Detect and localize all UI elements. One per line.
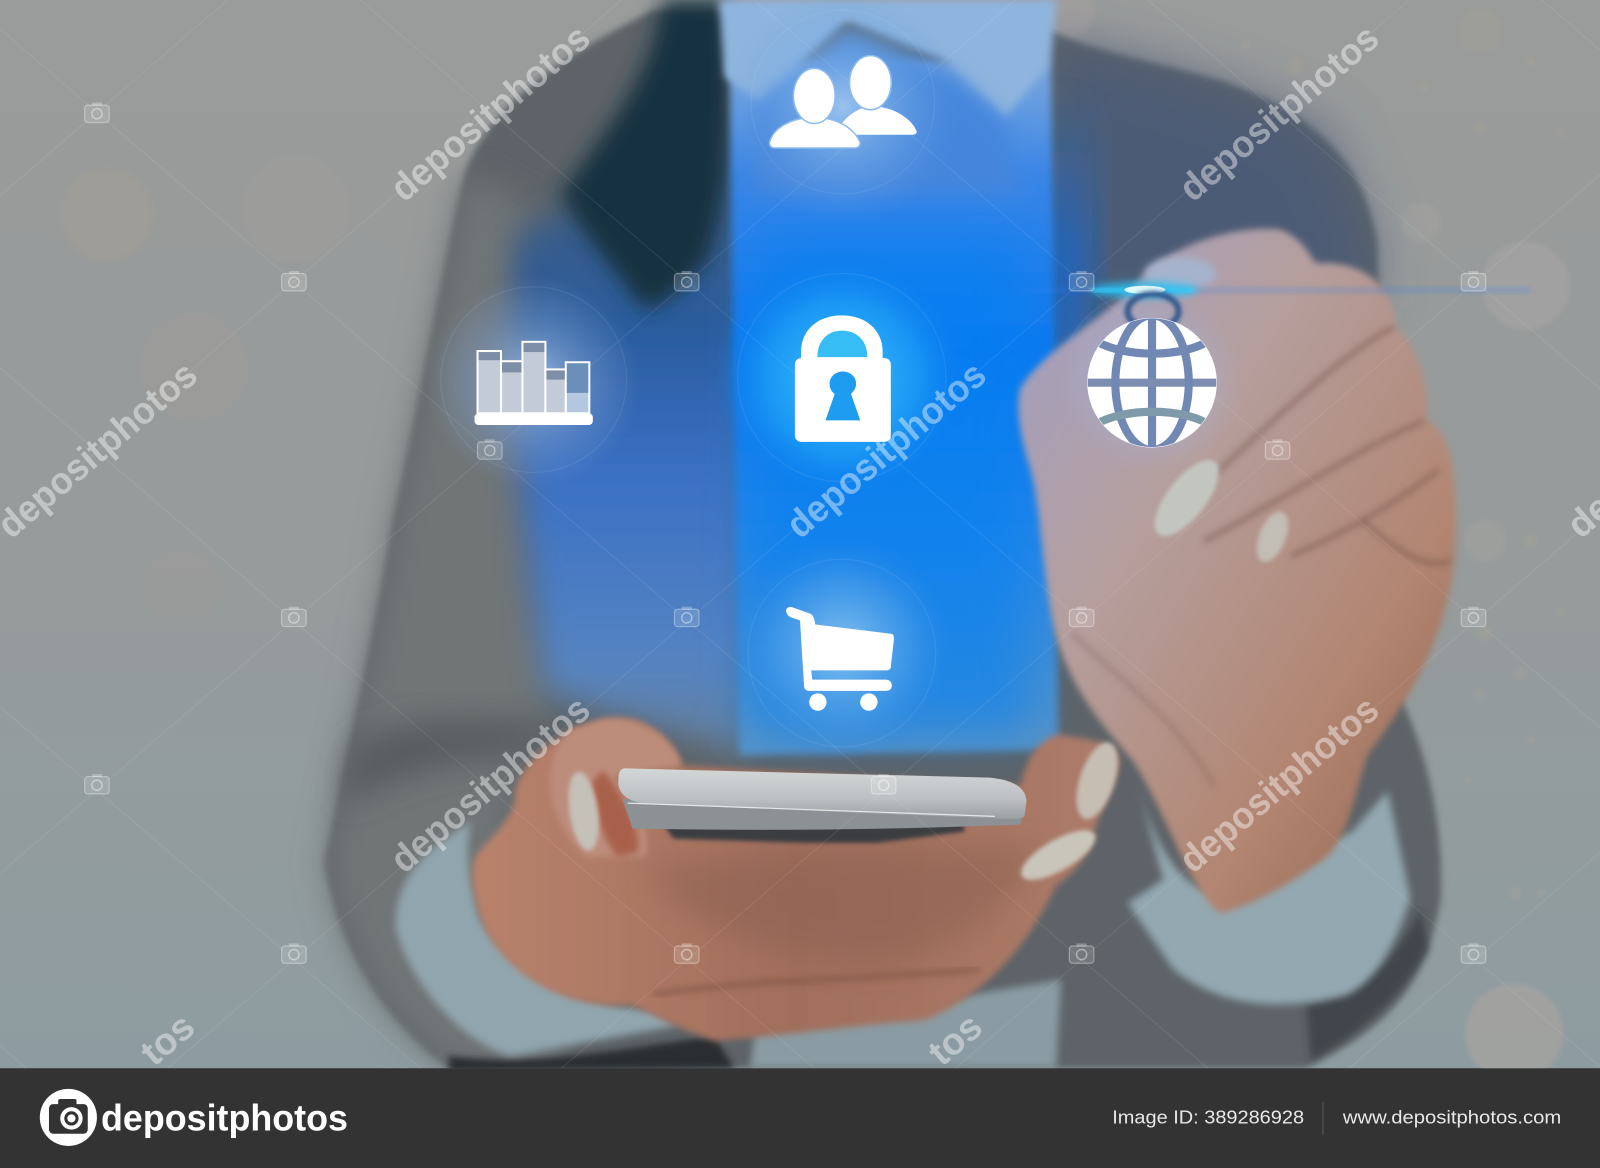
icon: people bbox=[769, 56, 917, 148]
left sleeve cuff bbox=[396, 821, 679, 1056]
watermark wordmarks: depositphotos bbox=[1171, 16, 1387, 209]
watermark wordmarks: depositphotos bbox=[382, 16, 598, 209]
footer logo: camera badge bbox=[40, 1089, 97, 1146]
nail: fingertip top bbox=[1145, 257, 1216, 290]
icon: shopping cart bbox=[786, 607, 894, 711]
glow: cart bbox=[757, 552, 934, 725]
blazer bbox=[324, 10, 1441, 1071]
left sleeve bbox=[324, 173, 571, 1068]
lower dark edge bbox=[449, 1036, 735, 1071]
nail: middle finger bbox=[1255, 510, 1290, 564]
shirt bbox=[730, 61, 1058, 755]
footer bar bbox=[0, 1068, 1600, 1168]
glow: people bbox=[757, 20, 933, 204]
hair bbox=[561, 0, 730, 308]
right hand bbox=[1018, 229, 1456, 913]
glow: chart bbox=[435, 287, 628, 476]
watermark wordmarks: depositphotos bbox=[778, 353, 994, 546]
thumb tip shadow bbox=[590, 770, 638, 857]
blue jacket overlay bbox=[514, 122, 750, 755]
icon halo rings bbox=[440, 47, 1116, 748]
icon: bar chart bbox=[474, 342, 593, 425]
lower shirt below hands bbox=[750, 980, 1061, 1068]
thumb nail bbox=[566, 770, 602, 852]
shirt collar bbox=[719, 0, 1056, 117]
icon: globe bbox=[1082, 314, 1222, 451]
speckles bbox=[1482, 630, 1542, 896]
glow: globe bbox=[1078, 309, 1229, 460]
footer image id: Image ID: 389286928 bbox=[1112, 1107, 1304, 1128]
right sleeve cuff bbox=[1128, 786, 1410, 1004]
bright shirt bands bbox=[750, 235, 1031, 735]
left hand bbox=[472, 719, 1126, 1041]
glow: lock bbox=[722, 282, 938, 472]
watermark wordmarks: tos bbox=[132, 1005, 202, 1073]
blue spill right of shirt bbox=[1049, 112, 1109, 354]
watermark wordmarks: depositphotos bbox=[1171, 688, 1387, 881]
footer divider bbox=[1322, 1102, 1323, 1135]
footer website: www.depositphotos.com bbox=[1342, 1107, 1561, 1128]
finger nail 1 bbox=[1074, 740, 1120, 821]
left hand shadows bbox=[662, 848, 1025, 960]
watermark wordmarks: depositphotos bbox=[382, 688, 598, 881]
footer logo: wordmark: depositphotos bbox=[101, 1098, 348, 1139]
finger nail 2 bbox=[1018, 828, 1098, 882]
watermark camera icons bbox=[85, 103, 1486, 963]
laser flare from pen tip bbox=[1020, 282, 1531, 329]
smartphone bbox=[618, 768, 1027, 843]
finger shadows bbox=[1071, 327, 1451, 786]
bokeh lights bbox=[1465, 244, 1567, 1068]
nail: index finger bbox=[1153, 458, 1221, 538]
watermark wordmarks: tos bbox=[920, 1005, 990, 1073]
icon: padlock bbox=[795, 315, 891, 442]
